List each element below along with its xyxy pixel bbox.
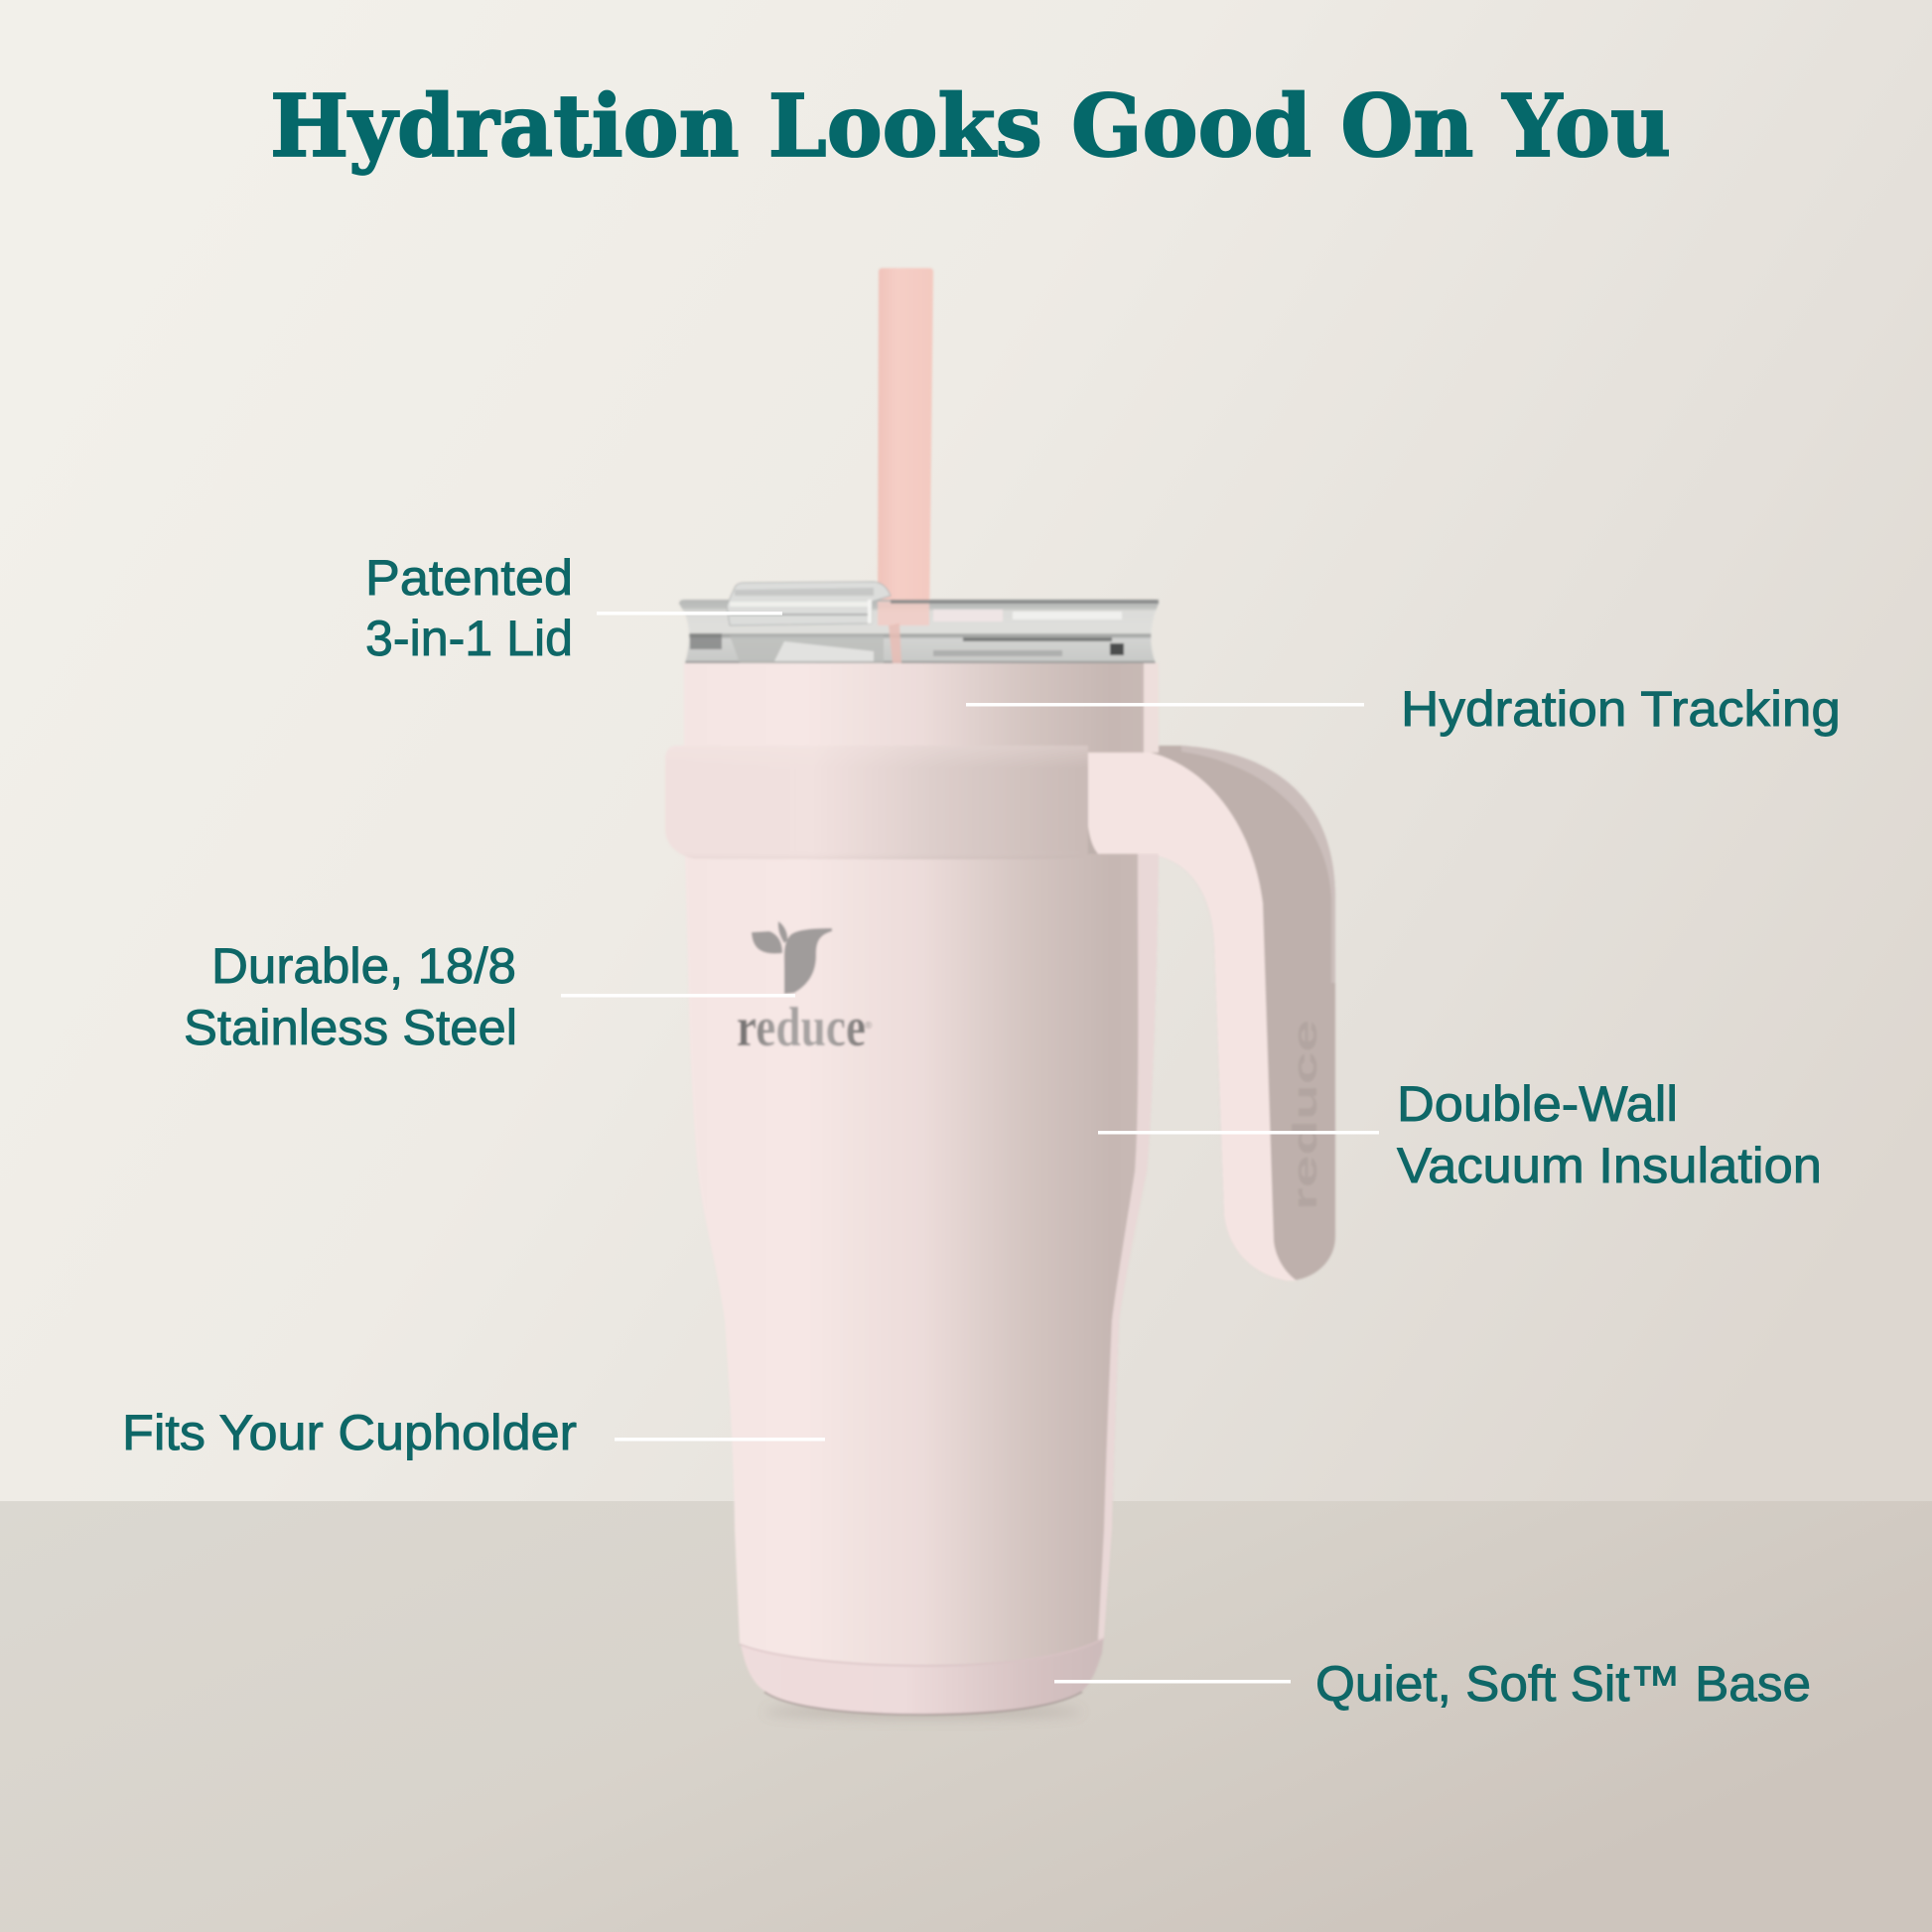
callout: Durable, 18/8 Stainless Steel: Stainless Steel	[184, 1000, 517, 1055]
soft-sit base	[740, 1633, 1104, 1715]
tumbler product illustration	[665, 268, 1335, 1719]
contact shadow	[764, 1705, 1082, 1719]
tumbler upper body	[684, 663, 1159, 753]
callout: Durable, 18/8 Stainless Steel: Durable, 18/8	[211, 938, 516, 994]
callout: Quiet, Soft Sit Base: Quiet, Soft Sit™ Base	[1315, 1656, 1811, 1712]
title: Hydration Looks Good On You	[270, 76, 1671, 177]
logo leaf mark	[752, 921, 832, 994]
right-edge highlight	[1098, 854, 1159, 1640]
callout: Durable, 18/8 Stainless Steel	[184, 938, 795, 1055]
handle	[1082, 746, 1335, 1281]
callout: Hydration Tracking: Hydration Tracking	[1401, 681, 1841, 737]
seam line above the base	[740, 1638, 1104, 1666]
callout: Double-Wall Vacuum Insulation: Vacuum Insulation	[1397, 1138, 1822, 1193]
callout: Patented 3-in-1 Lid	[365, 550, 782, 666]
registered mark: ®	[865, 1021, 873, 1032]
lid flip tab	[727, 582, 891, 625]
callout: Quiet, Soft Sit Base	[1054, 1656, 1811, 1712]
tumbler lower body	[685, 854, 1159, 1666]
callout: Patented 3-in-1 Lid: Patented	[365, 550, 573, 606]
engraved reduce logo	[737, 921, 873, 1058]
clear lid	[679, 582, 1159, 663]
callout: Double-Wall Vacuum Insulation	[1098, 1076, 1822, 1193]
callout: Hydration Tracking	[966, 681, 1841, 737]
handle embossed wordmark: reduce	[1287, 1020, 1324, 1210]
callout: Fits Your Cupholder: Fits Your Cupholder	[122, 1405, 577, 1460]
logo wordmark: reduce	[737, 997, 866, 1058]
handle collar	[665, 746, 1088, 860]
callout: Patented 3-in-1 Lid: 3-in-1 Lid	[365, 611, 573, 666]
callout: Double-Wall Vacuum Insulation: Double-Wall	[1397, 1076, 1678, 1132]
straw	[878, 268, 933, 625]
callout: Fits Your Cupholder	[122, 1405, 825, 1460]
